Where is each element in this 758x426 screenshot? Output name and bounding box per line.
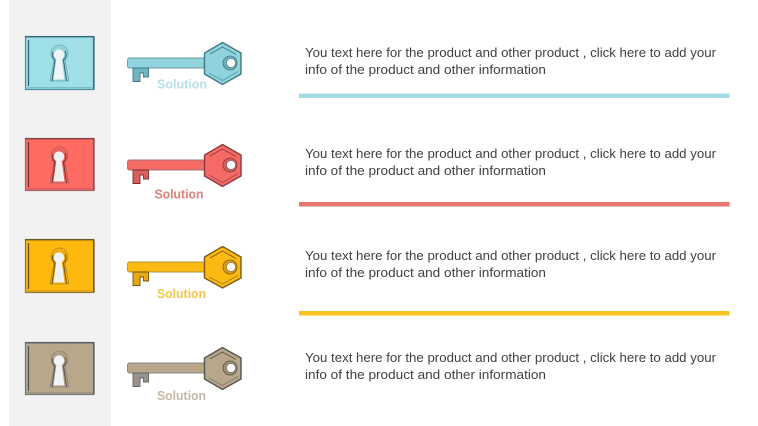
text block 2: You text here for the product and other product , click here to add your — [305, 146, 717, 161]
text block 2: info of the product and other information — [305, 163, 546, 178]
label: Solution blue: Solution — [157, 78, 207, 92]
panel: grey sidebar — [9, 0, 111, 426]
icon: tan key — [128, 348, 241, 390]
divider: red — [299, 202, 730, 206]
row 2: red — [25, 138, 730, 206]
text block 4: info of the product and other information — [305, 367, 546, 382]
row 1: blue — [25, 36, 730, 98]
divider: yellow — [299, 311, 730, 316]
text block 2 — [305, 146, 717, 178]
icon: blue keyhole plate — [25, 36, 94, 90]
label: Solution red: Solution — [154, 188, 204, 202]
label: Solution tan: Solution — [157, 389, 206, 403]
text block 1 — [305, 45, 717, 77]
text block 1: info of the product and other information — [305, 62, 546, 77]
row 4: tan — [25, 342, 717, 403]
icon: tan keyhole plate — [25, 342, 94, 394]
label: Solution yellow: Solution — [157, 287, 206, 301]
text block 3 — [305, 248, 717, 280]
divider: blue — [299, 94, 730, 98]
text block 4 — [305, 350, 717, 382]
icon: yellow key — [128, 246, 241, 288]
text block 3: You text here for the product and other product , click here to add your — [305, 248, 717, 263]
icon: red keyhole plate — [25, 138, 94, 190]
text block 1: You text here for the product and other product , click here to add your — [305, 45, 717, 60]
text block 3: info of the product and other information — [305, 265, 546, 280]
icon: blue key — [128, 42, 241, 84]
row 3: yellow — [25, 240, 730, 316]
text block 4: You text here for the product and other product , click here to add your — [305, 350, 717, 365]
icon: red key — [128, 144, 241, 186]
icon: yellow keyhole plate — [25, 240, 94, 292]
